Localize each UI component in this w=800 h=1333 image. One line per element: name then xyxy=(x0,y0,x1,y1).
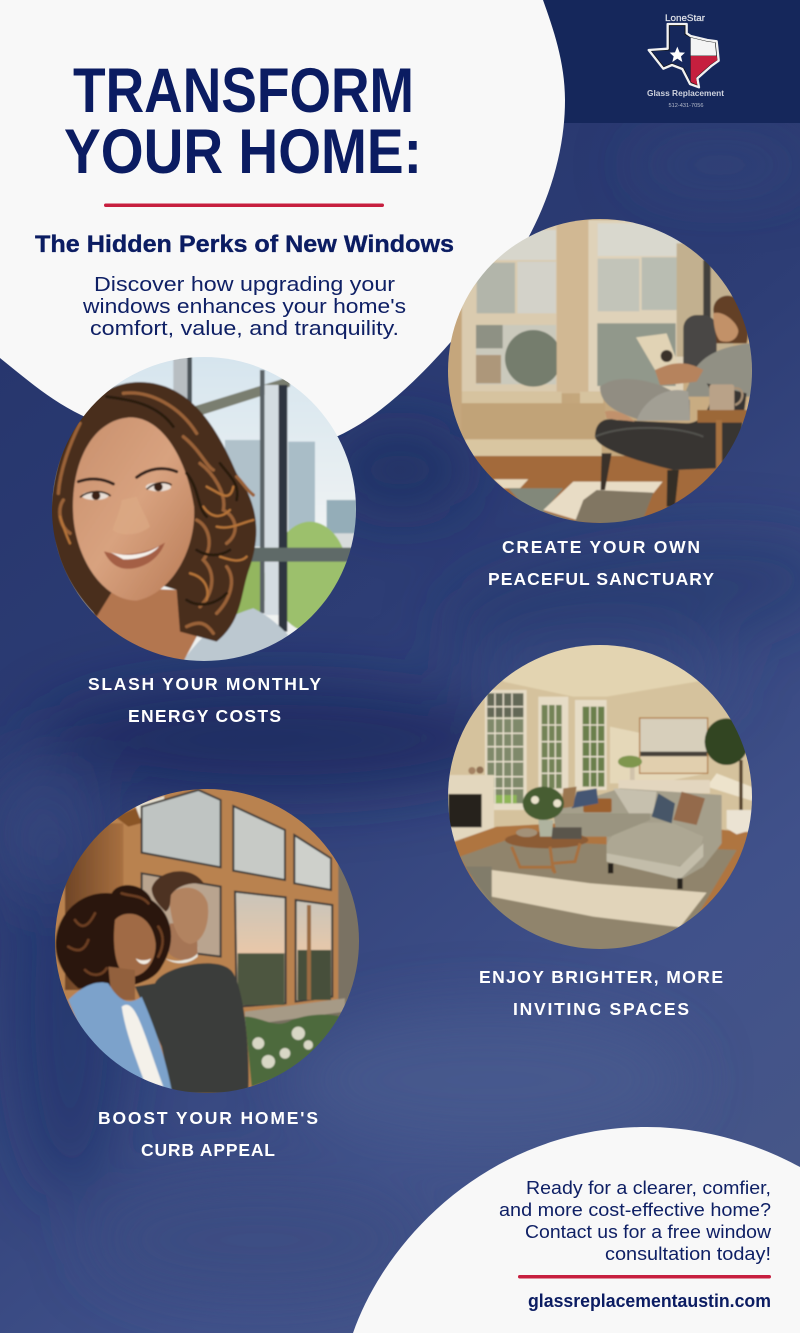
caption: peaceful sanctuary: PEACEFUL SANCTUARY xyxy=(488,569,714,589)
call to action text: and more cost-effective home? xyxy=(499,1200,771,1220)
caption: peaceful sanctuary xyxy=(488,537,714,589)
subtitle: The Hidden Perks of New Windows xyxy=(35,231,454,258)
photo: woman reading by window xyxy=(440,210,760,530)
red divider top xyxy=(104,204,384,207)
intro paragraph: windows enhances your home's xyxy=(82,295,406,318)
title: YOUR HOME: xyxy=(64,117,422,187)
caption: brighter spaces: INVITING SPACES xyxy=(513,999,689,1019)
title: TRANSFORM xyxy=(73,56,414,126)
call to action text xyxy=(499,1178,772,1264)
logo panel background xyxy=(530,0,800,123)
caption: energy costs xyxy=(88,674,321,726)
intro paragraph xyxy=(82,273,406,340)
caption: brighter spaces xyxy=(479,967,723,1019)
white blob: bottom-right contact panel xyxy=(353,1127,800,1333)
call to action text: Contact us for a free window xyxy=(525,1222,772,1242)
logo: LoneStar Glass Replacement xyxy=(647,13,724,109)
caption: curb appeal xyxy=(98,1108,318,1160)
logo phone number: 512-431-7056 xyxy=(668,103,704,109)
call to action text: consultation today! xyxy=(605,1244,771,1264)
caption: energy costs: SLASH YOUR MONTHLY xyxy=(88,674,321,694)
website url: glassreplacementaustin.com xyxy=(528,1291,771,1311)
icon: Texas flag map xyxy=(649,24,719,87)
caption: energy costs: ENERGY COSTS xyxy=(128,706,281,726)
photo: smiling woman by window xyxy=(52,357,356,661)
title xyxy=(64,56,422,187)
caption: brighter spaces: ENJOY BRIGHTER, MORE xyxy=(479,967,723,987)
caption: curb appeal: CURB APPEAL xyxy=(141,1140,275,1160)
call to action text: Ready for a clearer, comfier, xyxy=(526,1178,771,1198)
photo: bright living room xyxy=(440,640,760,960)
intro paragraph: comfort, value, and tranquility. xyxy=(90,317,399,340)
caption: curb appeal: BOOST YOUR HOME'S xyxy=(98,1108,318,1128)
logo name top: LoneStar xyxy=(665,13,705,23)
caption: peaceful sanctuary: CREATE YOUR OWN xyxy=(502,537,700,557)
white blob: top-left heading panel xyxy=(0,0,565,438)
intro paragraph: Discover how upgrading your xyxy=(94,273,395,296)
logo tagline: Glass Replacement xyxy=(647,88,724,98)
photo: couple outside home xyxy=(45,780,365,1100)
red divider bottom xyxy=(518,1275,771,1278)
